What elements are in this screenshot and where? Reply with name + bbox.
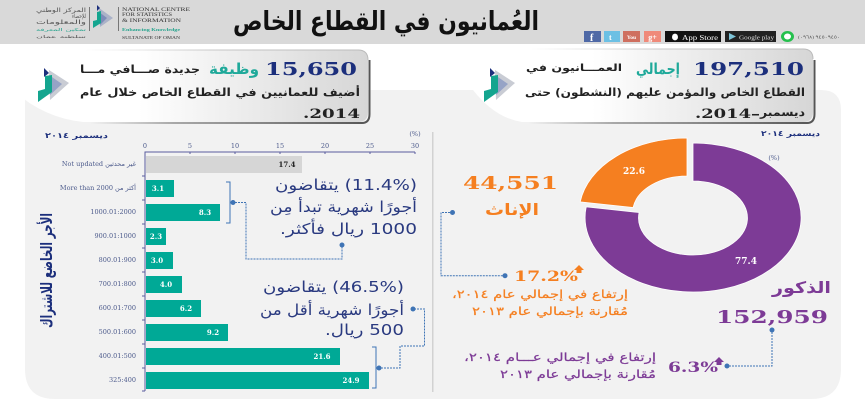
callout box: 197,510 total — [473, 49, 814, 123]
row labels: 800.01:900 — [99, 256, 136, 264]
bar values: 3.1 — [152, 184, 164, 193]
bar values: 6.2 — [180, 304, 192, 313]
text block: القطاع الخاص والمؤمن عليهم (النشطون) حتى — [525, 86, 805, 99]
social icons — [584, 31, 840, 44]
social icons: App Store — [682, 33, 719, 42]
bracket connector — [372, 306, 424, 388]
arrow up — [574, 265, 584, 273]
chart date: ديسمبر ٢٠١٤ — [45, 131, 108, 140]
axis tick labels: 30 — [411, 142, 419, 150]
row labels: 1000.01:2000 — [90, 208, 136, 216]
logo: national centre for statistics: سلطنة عمان — [36, 34, 88, 39]
row labels: Not updated غير محدثين — [62, 160, 137, 168]
stat label: jobs: وظيفة — [209, 60, 259, 78]
logo: national centre for statistics: & INFORMATION — [122, 18, 181, 24]
arrow up — [714, 357, 724, 365]
icon: logo mark — [38, 68, 69, 102]
note: مُقارنة بإجمالي عام ٢٠١٣ — [500, 367, 656, 382]
row labels: 400.01:500 — [99, 352, 136, 360]
bar values: 24.9 — [342, 376, 360, 385]
row labels: 500.01:600 — [99, 328, 136, 336]
social icons: You — [627, 35, 636, 41]
bar values: 9.2 — [207, 328, 219, 337]
logo: national centre for statistics: والمعلومات — [36, 19, 86, 26]
axis tick labels: 25 — [366, 142, 374, 150]
bar chart: wage distribution — [37, 130, 421, 391]
connector — [441, 210, 508, 278]
logo: national centre for statistics: للإحصاء — [72, 13, 86, 20]
callout box: 15,650 new jobs — [15, 50, 370, 123]
logo: national centre for statistics: NATIONAL CENTRE — [122, 7, 191, 13]
social icons: (٠٩٦٨) ٩٤٥٠٩٤٥٠ — [798, 34, 840, 40]
axis tick labels: 15 — [276, 142, 284, 150]
logo: national centre for statistics: SULTANATE OF OMAN — [122, 35, 180, 40]
row labels: 600.01:700 — [99, 304, 136, 312]
y axis title: الأجر الخاضع للاشتراك — [37, 213, 56, 328]
title: العُمانيون في القطاع الخاص — [233, 7, 539, 37]
axis tick labels: 20 — [321, 142, 329, 150]
count: 152,959 — [716, 307, 828, 328]
text block: .2014 — [303, 107, 360, 122]
callout text — [260, 278, 404, 339]
callout text: (11.4%) يتقاضون — [275, 176, 417, 194]
logo: national centre for statistics: تمكين المعرفة — [36, 27, 86, 32]
text block: جديدة صـــافي مـــا — [80, 63, 200, 76]
row labels: 325:400 — [109, 376, 136, 384]
donut values: 22.6 — [623, 167, 645, 177]
text block: أضيف للعمانيين في القطاع الخاص خلال عام — [80, 85, 360, 99]
row labels: More than 2000 أكثر من — [60, 183, 136, 192]
bracket connector — [226, 182, 344, 259]
callout text: أجورًا شهرية أقل من — [260, 300, 404, 319]
row labels: 700.01:800 — [99, 280, 136, 288]
bar values — [150, 160, 360, 385]
segment: females 22.6 — [580, 138, 687, 208]
text block: العمـــانيون في — [526, 63, 622, 74]
callout text: (46.5%) يتقاضون — [263, 278, 404, 296]
row labels — [60, 160, 137, 384]
panel background — [25, 90, 841, 399]
donut values: 77.4 — [735, 257, 757, 267]
females stats — [441, 173, 628, 319]
bar values: 17.4 — [278, 160, 296, 169]
bar values: 21.6 — [313, 352, 331, 361]
connector — [724, 328, 774, 368]
percent: 17.2% — [514, 269, 578, 285]
text block: .2014– — [695, 107, 760, 122]
callout text: 1000 ريال فأكثر. — [280, 218, 417, 238]
count: 44,551 — [463, 173, 558, 194]
note: مُقارنة بإجمالي عام ٢٠١٣ — [472, 304, 628, 319]
social icons: g+ — [648, 33, 657, 42]
axis tick labels: 5 — [188, 142, 192, 150]
bars — [146, 156, 369, 389]
logo: national centre for statistics: المركز الوطني — [36, 7, 86, 14]
donut values: (%) — [768, 154, 780, 162]
callout text — [270, 176, 417, 238]
callout: 11.4% earn 1000 or more — [226, 176, 417, 259]
bar values: 8.3 — [199, 208, 211, 217]
note: إرتفاع في إجمالي عام ٢٠١٤، — [452, 287, 628, 302]
social icons: f — [590, 33, 594, 44]
axis unit: (%) — [409, 130, 421, 138]
note: إرتفاع في إجمالي عـــام ٢٠١٤، — [464, 350, 656, 365]
icon: logo mark — [484, 68, 515, 102]
logo: national centre for statistics: FOR STATISTICS — [122, 12, 172, 18]
row labels: 900.01:1000 — [95, 232, 136, 240]
stat label: total: إجمالي — [636, 60, 680, 78]
chart date: donut: ديسمبر ٢٠١٤ — [761, 129, 820, 138]
callout text: أجورًا شهرية تبدأ مِن — [270, 197, 417, 216]
label: الإناث — [485, 200, 539, 219]
stat: 15,650: 15,650 — [265, 59, 357, 80]
social icons: Google play — [739, 34, 775, 42]
text block: ديسمبر — [759, 106, 805, 119]
text block — [525, 63, 805, 122]
axes — [142, 152, 415, 391]
divider — [432, 132, 434, 392]
donut chart: gender split — [580, 138, 801, 292]
axis tick labels — [143, 142, 419, 150]
axis tick labels: 0 — [143, 142, 147, 150]
percent: 6.3% — [668, 360, 718, 376]
segment: males 77.4 — [585, 143, 801, 292]
stat: 197,510: 197,510 — [693, 59, 804, 80]
text block — [80, 63, 360, 122]
males stats — [464, 278, 831, 382]
header band — [0, 0, 865, 44]
axis tick labels: 10 — [231, 142, 239, 150]
bar values: 4.0 — [160, 280, 172, 289]
callout text: 500 ريال. — [325, 321, 404, 339]
logo: national centre for statistics — [36, 5, 191, 40]
bar values: 2.3 — [150, 232, 162, 241]
note — [452, 287, 628, 319]
callout: 46.5% earn under 500 — [260, 278, 424, 388]
note — [464, 350, 656, 382]
donut values — [623, 154, 780, 267]
bar values: 3.0 — [151, 256, 163, 265]
logo: national centre for statistics: Enhancing Knowledge — [122, 27, 180, 32]
social icons: t — [609, 33, 612, 42]
label: الذكور — [771, 278, 831, 297]
